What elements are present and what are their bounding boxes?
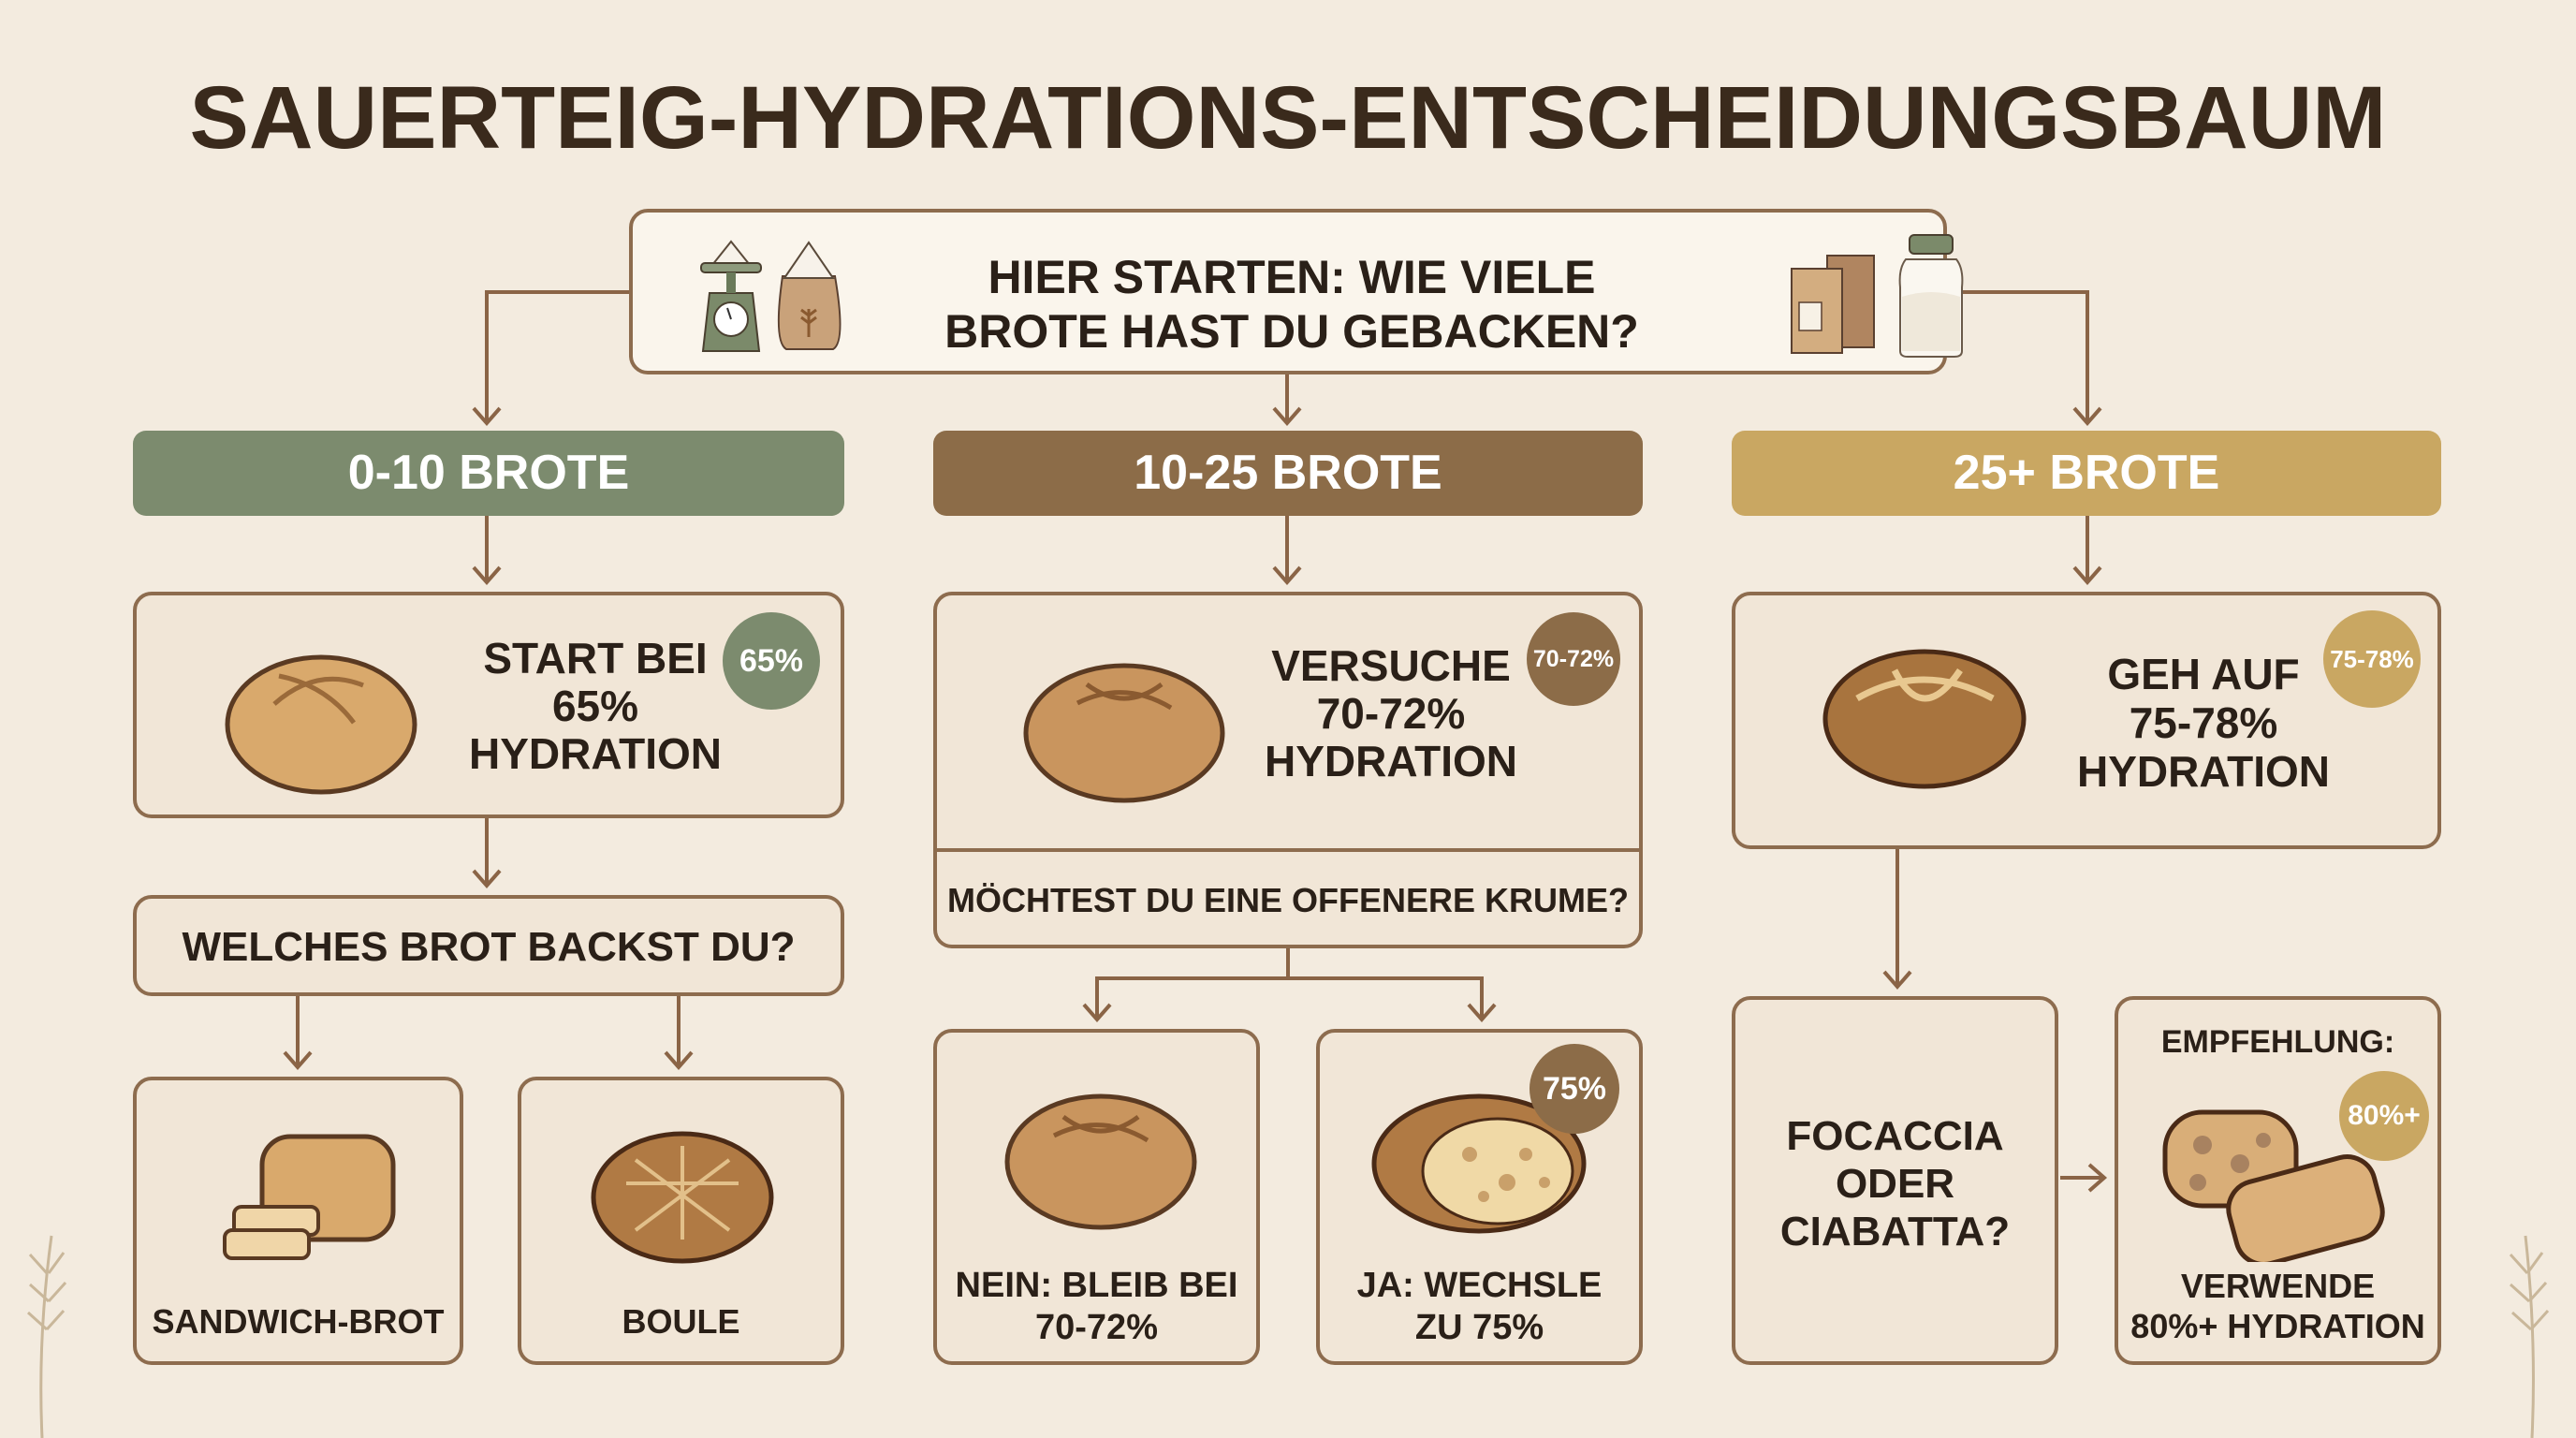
text: HYDRATION bbox=[1265, 737, 1517, 785]
text: 75-78% bbox=[2130, 698, 2277, 747]
badge: 65% bbox=[739, 643, 803, 679]
text bbox=[469, 634, 722, 778]
badge: 70-72% bbox=[1533, 646, 1614, 672]
icon: jar bbox=[1898, 234, 1964, 358]
icon: open crumb bread bbox=[1372, 1093, 1586, 1234]
icon: loaf bbox=[223, 1135, 395, 1260]
panel: versuche bbox=[933, 592, 1643, 948]
start question text: BROTE HAST DU GEBACKEN? bbox=[944, 305, 1639, 358]
icon: focaccia & ciabatta bbox=[2162, 1110, 2385, 1262]
panel: nein bbox=[933, 1029, 1260, 1365]
text: GEH AUF bbox=[2107, 650, 2300, 698]
question: welches brot bbox=[133, 895, 844, 996]
badge: 80%+ bbox=[2348, 1100, 2421, 1131]
panel: nein: NEIN: BLEIB BEI bbox=[956, 1266, 1237, 1305]
title: SAUERTEIG-HYDRATIONS-ENTSCHEIDUNGSBAUM bbox=[190, 68, 2386, 168]
question: welches brot: WELCHES BROT BACKST DU? bbox=[182, 924, 796, 970]
icon: bread bbox=[1005, 1093, 1196, 1230]
panel: nein: 70-72% bbox=[1035, 1308, 1158, 1347]
icon: flour sack bbox=[777, 241, 841, 350]
text: 65% bbox=[552, 682, 638, 730]
text: VERSUCHE bbox=[1271, 641, 1511, 690]
start box bbox=[629, 209, 1947, 374]
badge bbox=[2339, 1071, 2429, 1161]
header: 25+: 25+ BROTE bbox=[1954, 446, 2219, 500]
panel: geh auf bbox=[1732, 592, 2441, 849]
panel: empfehlung: 80%+ HYDRATION bbox=[2130, 1307, 2425, 1345]
header: 0-10: 0-10 BROTE bbox=[348, 446, 629, 500]
panel: focaccia question: FOCACCIA bbox=[1786, 1113, 2004, 1159]
icon: scale bbox=[700, 240, 762, 352]
badge: 75-78% bbox=[2330, 645, 2414, 673]
panel: boule bbox=[518, 1077, 844, 1365]
text: HYDRATION bbox=[2077, 747, 2330, 796]
panel: ja bbox=[1316, 1029, 1643, 1365]
icon: boule bbox=[592, 1131, 773, 1264]
text: START BEI bbox=[483, 634, 708, 682]
badge bbox=[1530, 1044, 1619, 1134]
panel: ja: JA: WECHSLE bbox=[1357, 1266, 1602, 1305]
decoration: wheat right bbox=[2510, 1236, 2549, 1438]
panel: boule: BOULE bbox=[622, 1302, 739, 1341]
text bbox=[1265, 641, 1517, 785]
panel: sandwich: SANDWICH-BROT bbox=[153, 1302, 444, 1341]
icon: round bread bbox=[225, 655, 417, 794]
header: 25+ bbox=[1732, 431, 2441, 516]
badge bbox=[723, 612, 820, 710]
header: 0-10 bbox=[133, 431, 844, 516]
header: 10-25 bbox=[933, 431, 1643, 516]
question: MÖCHTEST DU EINE OFFENERE KRUME? bbox=[947, 881, 1629, 919]
panel: empfehlung: EMPFEHLUNG: bbox=[2161, 1024, 2394, 1060]
panel: sandwich bbox=[133, 1077, 463, 1365]
icon: bread bbox=[1024, 663, 1224, 803]
header: 10-25: 10-25 BROTE bbox=[1134, 446, 1442, 500]
icon: rustic bread bbox=[1823, 650, 2026, 788]
panel: ja: ZU 75% bbox=[1415, 1308, 1544, 1347]
panel: start 65% bbox=[133, 592, 844, 818]
text: 70-72% bbox=[1317, 689, 1465, 738]
panel: focaccia question: ODER bbox=[1836, 1161, 1954, 1207]
text: HYDRATION bbox=[469, 729, 722, 778]
panel: focaccia question bbox=[1732, 996, 2058, 1365]
decoration: wheat left bbox=[27, 1236, 66, 1438]
panel: empfehlung: VERWENDE bbox=[2181, 1267, 2375, 1305]
start question text: HIER STARTEN: WIE VIELE bbox=[988, 251, 1596, 303]
badge: 75% bbox=[1543, 1071, 1606, 1107]
panel: focaccia question: CIABATTA? bbox=[1780, 1209, 2010, 1255]
panel: empfehlung bbox=[2115, 996, 2441, 1365]
badge bbox=[1527, 612, 1620, 706]
badge bbox=[2323, 610, 2421, 708]
icon: paper bags bbox=[1791, 255, 1875, 354]
text bbox=[2077, 650, 2330, 796]
start question text bbox=[944, 251, 1639, 358]
